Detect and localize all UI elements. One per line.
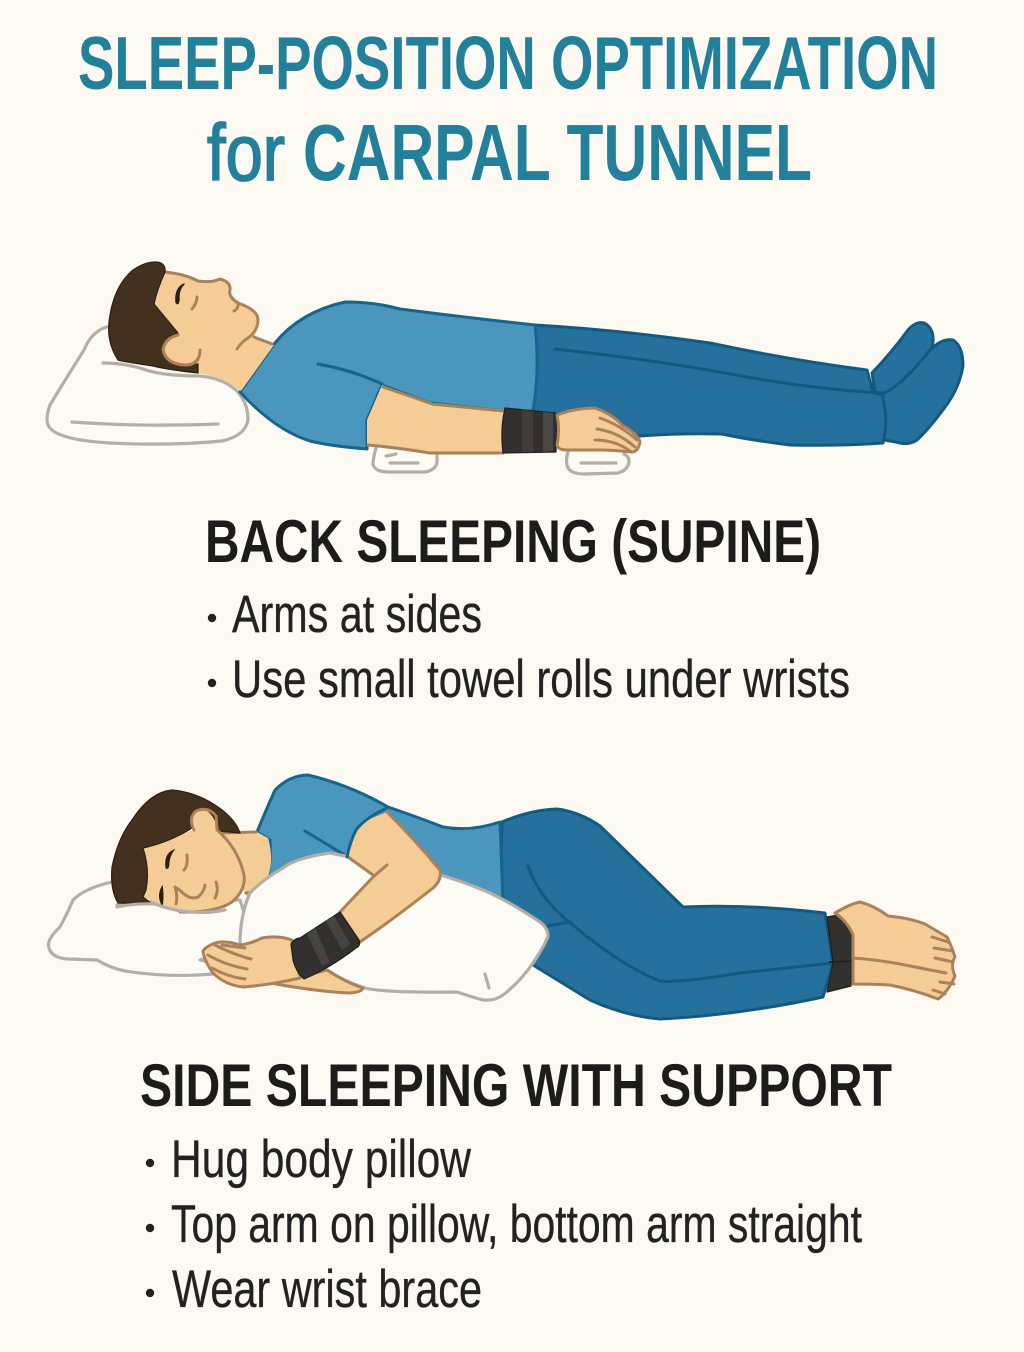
- head pillow: [48, 882, 260, 975]
- ear: [163, 335, 200, 365]
- trousers: [533, 325, 886, 445]
- hair: [112, 790, 240, 904]
- heading: back sleeping: BACK SLEEPING (SUPINE): [205, 508, 821, 575]
- feet: [835, 902, 955, 999]
- towel roll under elbow: [373, 448, 437, 472]
- lower forearm: [270, 970, 363, 993]
- bullet list: side sleeping: [146, 1130, 862, 1319]
- head and neck: [154, 272, 274, 391]
- sleeve edge: [347, 808, 387, 857]
- hand: [203, 937, 300, 987]
- t-shirt: [240, 302, 537, 449]
- head pillow edge under face: [117, 904, 225, 912]
- near foot: [883, 340, 963, 444]
- head and neck: [143, 809, 271, 911]
- arm outline: [368, 387, 503, 453]
- title: CARPAL TUNNEL: [303, 108, 812, 197]
- illustration: side sleeping figure: [48, 775, 955, 1019]
- bullet list: back sleeping: Use small towel rolls under wrists: [232, 650, 850, 709]
- wrist brace: [291, 912, 360, 979]
- trousers: [500, 809, 833, 1019]
- towel roll under hand: [566, 452, 629, 474]
- hand: [557, 408, 640, 452]
- bullet list: side sleeping: Hug body pillow: [171, 1130, 472, 1189]
- far foot: [872, 323, 933, 394]
- arm: [367, 385, 503, 453]
- bullet list: back sleeping: [208, 585, 850, 709]
- t-shirt: [257, 775, 503, 905]
- upper arm: [340, 812, 440, 942]
- title: for: [207, 108, 285, 197]
- title: [78, 21, 938, 197]
- ankle cuffs: [827, 915, 852, 992]
- bullet list: back sleeping: Arms at sides: [232, 585, 482, 644]
- wrist brace: [502, 408, 557, 453]
- illustration: back sleeping figure: [47, 262, 963, 474]
- body pillow: [200, 853, 548, 1000]
- bullet list: side sleeping: Wear wrist brace: [172, 1260, 482, 1319]
- head pillow: [47, 326, 248, 444]
- ear and face outline: [180, 809, 244, 912]
- hair: [109, 262, 198, 373]
- face features: [160, 850, 217, 904]
